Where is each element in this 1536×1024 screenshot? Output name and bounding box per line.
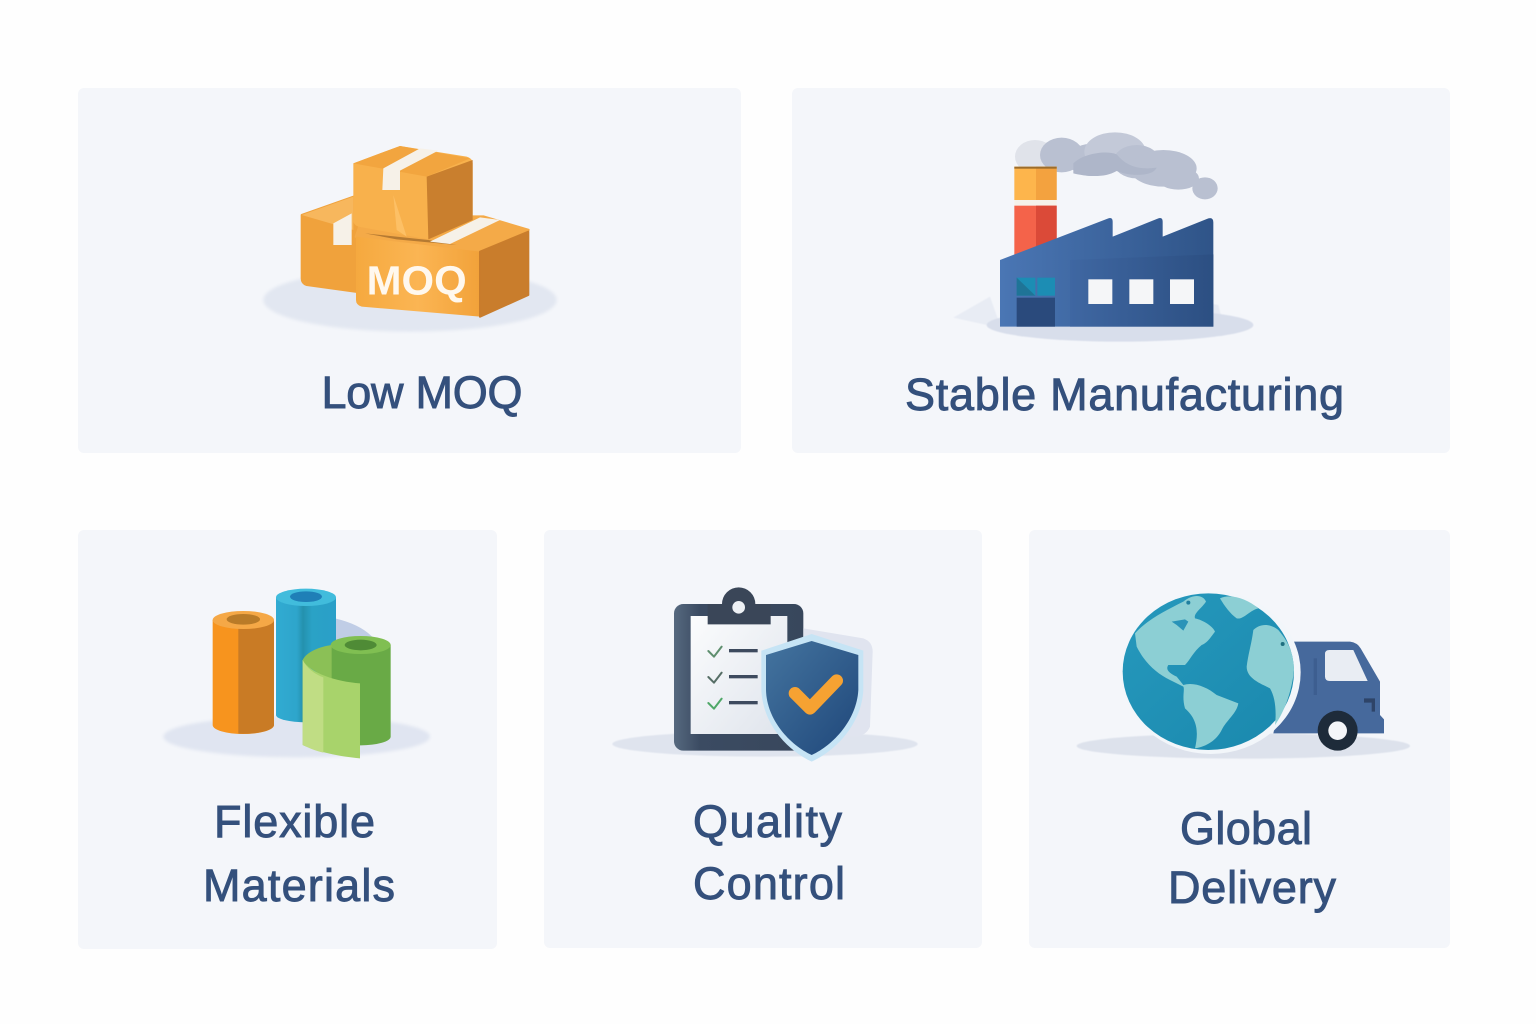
heading: Quality Control: Quality: [693, 796, 842, 847]
panel: Global Delivery: [1029, 530, 1450, 948]
icon: globe and truck: [1077, 591, 1410, 759]
icon: clipboard and shield: [612, 587, 918, 762]
panel: Quality Control: [544, 530, 982, 948]
panel: Flexible Materials: [78, 530, 497, 949]
panel: Low MOQ: [78, 88, 741, 453]
smoke cloud: [1015, 132, 1218, 199]
icon: factory: [953, 132, 1253, 342]
icon: material rolls: [163, 589, 430, 758]
heading: Low MOQ: Low MOQ: [322, 367, 522, 418]
panel: Stable Manufacturing: [792, 88, 1450, 453]
heading: Global Delivery: Global: [1180, 803, 1312, 854]
heading: Global Delivery: Delivery: [1168, 862, 1336, 913]
heading: Stable Manufacturing: Stable Manufacturing: [905, 369, 1344, 420]
heading: Quality Control: Control: [693, 858, 845, 909]
heading: Flexible Materials: Materials: [203, 860, 395, 911]
label: MOQ: MOQ: [367, 257, 467, 303]
heading: Quality Control: [693, 796, 845, 909]
heading: Global Delivery: [1168, 803, 1336, 913]
heading: Flexible Materials: Flexible: [214, 796, 375, 847]
heading: Flexible Materials: [203, 796, 395, 911]
icon: MOQ boxes: [263, 146, 557, 332]
